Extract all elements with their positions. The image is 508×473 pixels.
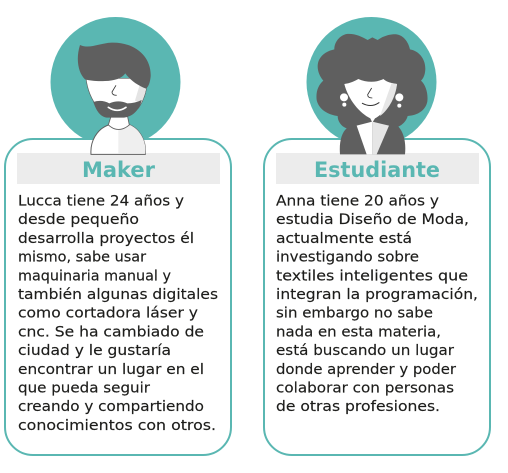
text block: estudiante description: Anna tiene 20 años y	[276, 194, 439, 210]
text block: maker description: cnc. Se ha cambiado de	[18, 324, 204, 340]
text block: maker description: como cortadora láser y	[18, 306, 198, 322]
text block: estudiante description: colaborar con personas	[276, 380, 454, 396]
card: estudiante	[264, 139, 490, 455]
text block: maker description: ciudad y le gustaría	[18, 343, 171, 359]
heading band: estudiante	[276, 153, 479, 184]
text block: maker description: conocimientos con otros.	[18, 418, 216, 434]
text block: maker description: también algunas digitales	[18, 287, 218, 303]
text block: estudiante description: está buscando un lugar	[276, 343, 454, 359]
text block: estudiante description	[276, 194, 478, 415]
heading band: maker	[17, 153, 220, 184]
panel: maker	[5, 17, 231, 455]
card: maker	[5, 139, 231, 455]
text block: estudiante description: integran la programación,	[276, 287, 478, 303]
text block: maker description: creando y compartiendo	[18, 399, 204, 415]
text block: maker description	[18, 194, 218, 434]
text block: maker description: Lucca tiene 24 años y	[18, 194, 184, 210]
icon: woman with curly hair	[316, 34, 428, 154]
text block: estudiante description: nada en esta materia,	[276, 324, 441, 340]
text block: estudiante description: estudia Diseño de Moda,	[276, 212, 469, 228]
icon: bearded man	[78, 43, 151, 154]
text block: estudiante description: investigando sobre	[276, 250, 419, 266]
text block: maker description: maquinaria manual y	[18, 268, 171, 284]
text block: maker description: que pueda seguir	[18, 380, 150, 396]
text block: maker description: desde pequeño	[18, 212, 139, 228]
text block: estudiante description: textiles inteligentes que	[276, 268, 468, 284]
heading: Maker: Maker	[82, 158, 156, 182]
panel: estudiante	[264, 17, 490, 455]
heading: Estudiante: Estudiante	[314, 158, 440, 182]
avatar circle: maker	[50, 17, 180, 147]
avatar circle: estudiante	[306, 17, 436, 147]
text block: estudiante description: actualmente está	[276, 231, 412, 247]
text block: maker description: mismo, sabe usar	[18, 250, 146, 266]
text block: estudiante description: sin embargo no sabe	[276, 306, 433, 322]
text block: maker description: encontrar un lugar en el	[18, 362, 204, 378]
text block: estudiante description: donde aprender y poder	[276, 362, 456, 378]
text block: estudiante description: de otras profesiones.	[276, 399, 440, 415]
text block: maker description: desarrolla proyectos él	[18, 231, 194, 247]
